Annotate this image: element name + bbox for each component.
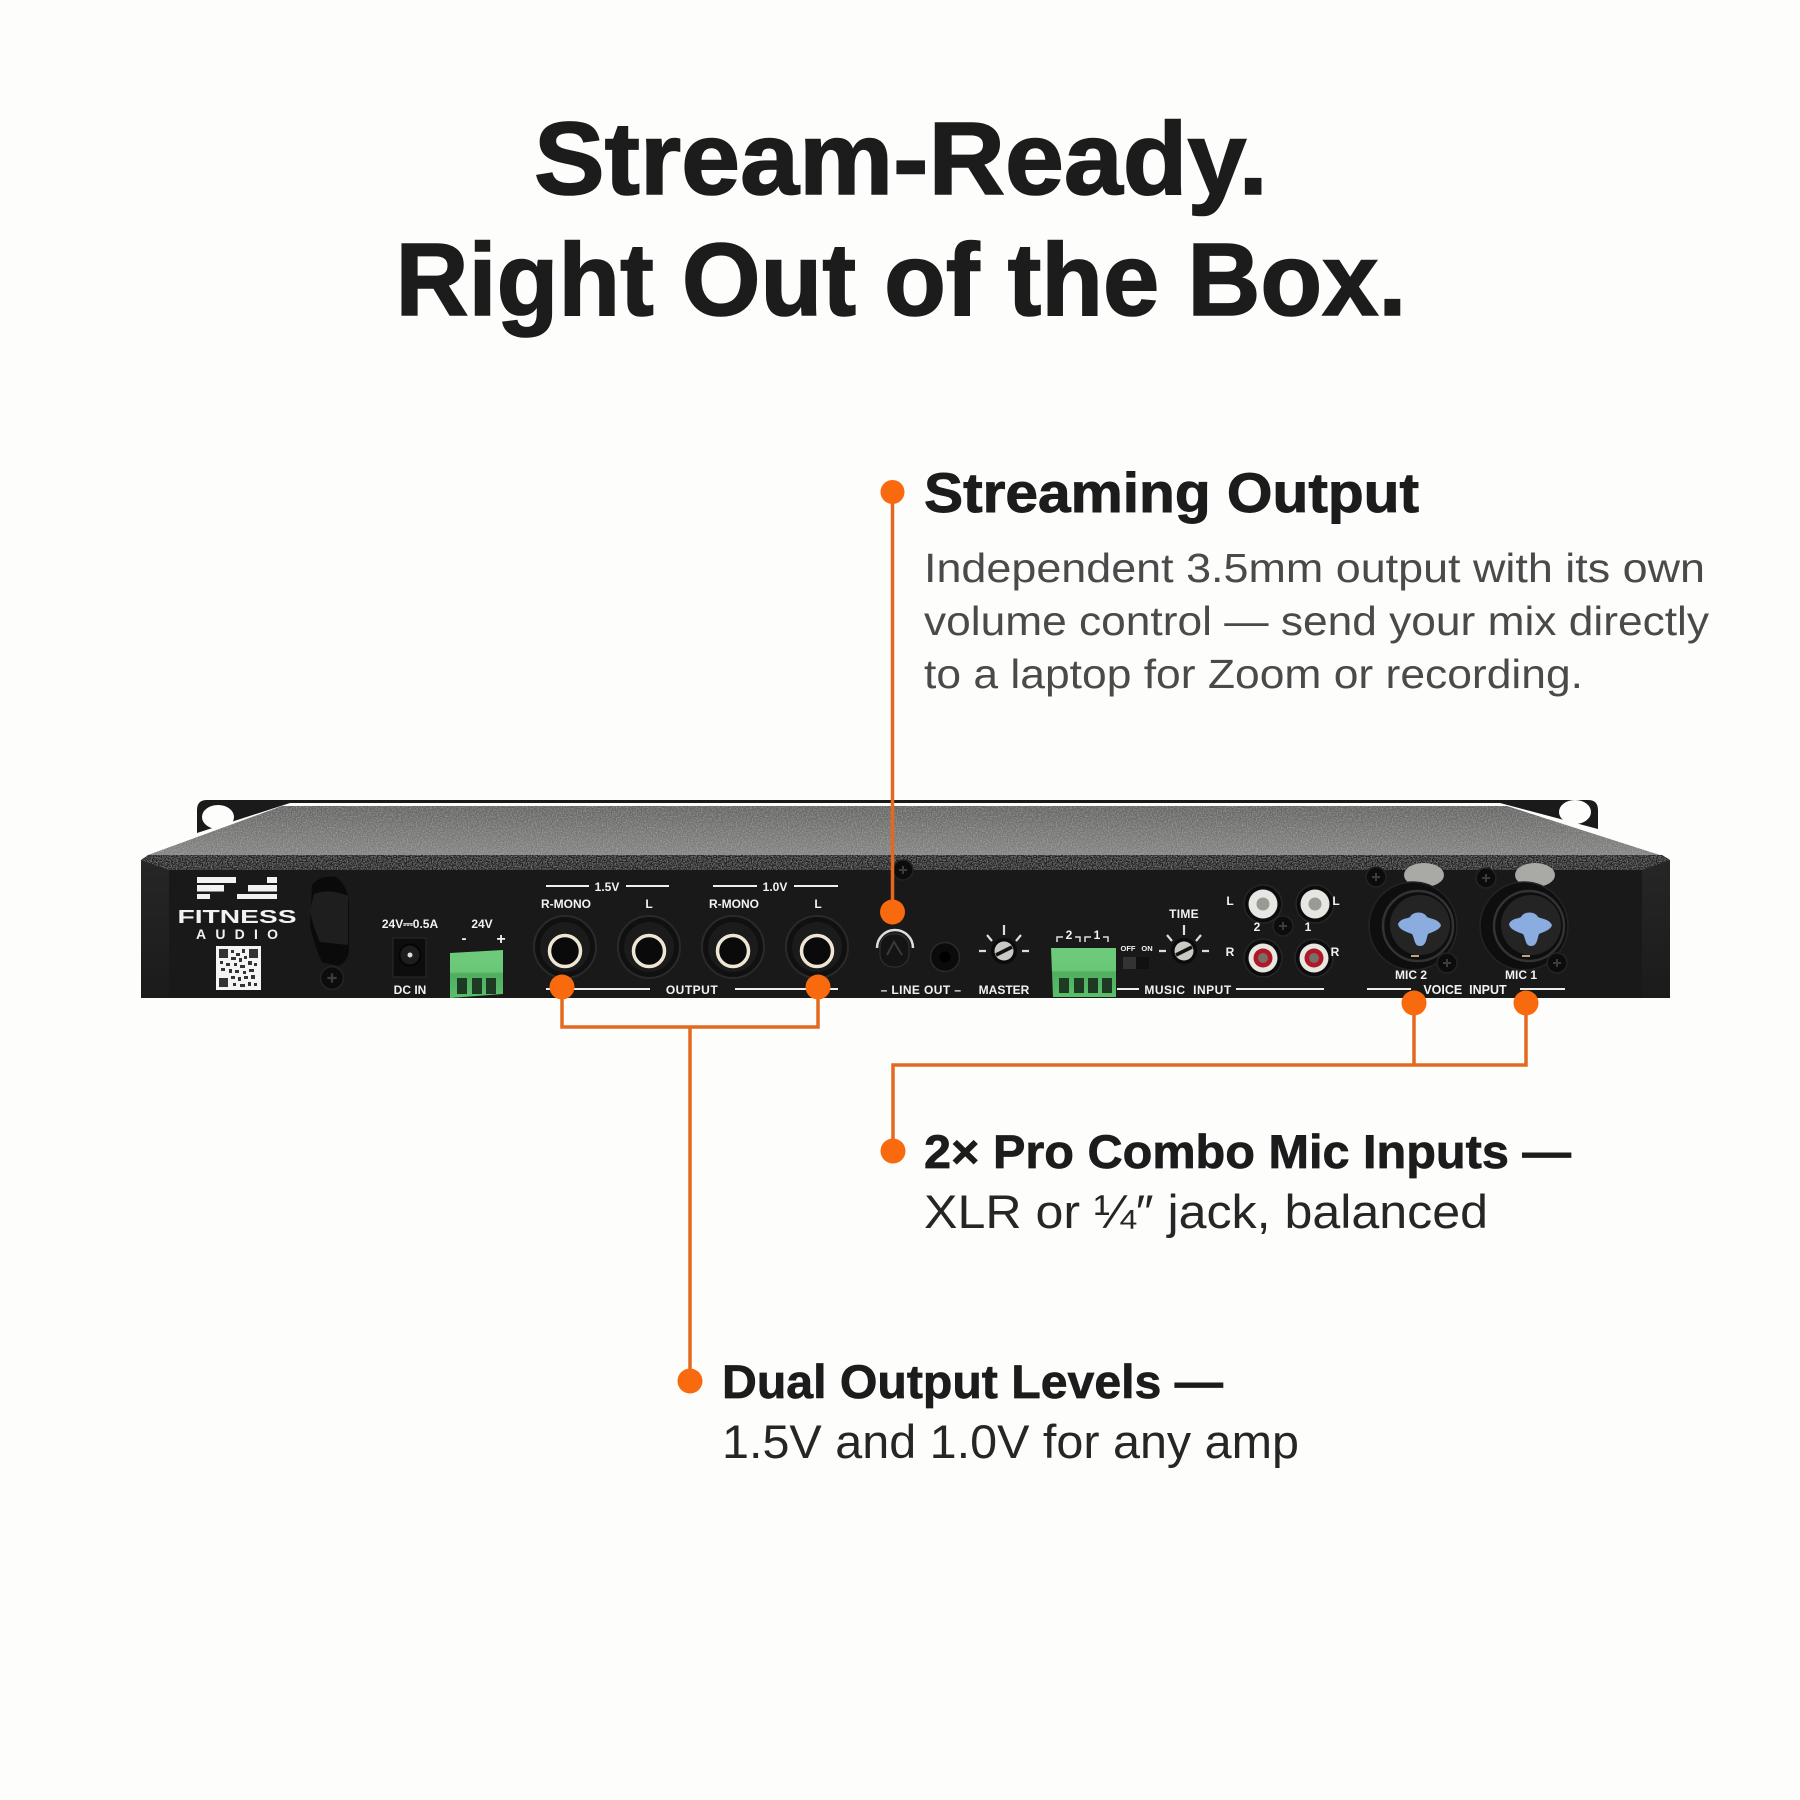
device front panel [141, 855, 1670, 998]
output jacks 1.5V: L [645, 897, 653, 911]
dots: mic anchors [880, 990, 1538, 1164]
voice input XLR combo jacks: VOICE INPUT [1423, 983, 1507, 997]
DC in power jack: DC IN [394, 983, 426, 997]
line out: toggle and 3.5mm jack: – LINE OUT – [881, 983, 961, 997]
logo: Fitness Audio [178, 877, 296, 942]
voice input XLR combo jacks: MIC 1 [1505, 968, 1537, 982]
icon: QR code [216, 946, 261, 990]
24V green terminal: - [462, 930, 466, 947]
description: mic inputs: XLR or ¼″ jack, balanced [924, 1185, 1488, 1238]
dot: top end [880, 480, 904, 504]
off/on switch: OFF [1120, 944, 1136, 953]
music input terminal: 2 [1066, 928, 1073, 942]
time knob: TIME [1169, 907, 1199, 921]
music input terminal [1051, 928, 1116, 997]
heading: streaming output: Streaming Output [924, 461, 1419, 524]
dot: line out anchor [880, 900, 905, 924]
music input RCA jacks: L [1226, 894, 1234, 908]
output jacks 1.5V [534, 880, 680, 978]
connector: streaming output [891, 492, 894, 912]
heading: dual output levels: Dual Output Levels — [722, 1355, 1223, 1408]
dots: output anchors [550, 974, 830, 1394]
description: streaming output: volume control — send your mix directly [924, 598, 1710, 644]
description: streaming output: to a laptop for Zoom or recording. [924, 651, 1583, 697]
24V green terminal [450, 917, 506, 998]
title: Right Out of the Box. [396, 222, 1406, 337]
music input RCA jacks: 2 [1254, 920, 1261, 934]
device: rear panel of rack audio mixer [141, 800, 1670, 998]
title [396, 101, 1406, 337]
off/on switch: ON [1141, 944, 1153, 953]
DC in power jack [382, 917, 438, 997]
24V green terminal: + [496, 931, 506, 948]
music input RCA jacks: MUSIC INPUT [1144, 983, 1232, 997]
music input terminal: 1 [1094, 928, 1101, 942]
time knob [1159, 907, 1209, 964]
output jacks 1.0V: R-MONO [709, 897, 759, 911]
output jacks 1.5V: R-MONO [541, 897, 591, 911]
connector: mic inputs [893, 1003, 1526, 1151]
DC in power jack: 24V⎓0.5A [382, 917, 438, 931]
master knob: MASTER [979, 983, 1030, 997]
music input RCA jacks [1117, 885, 1340, 997]
description: dual output levels: 1.5V and 1.0V for any amp [722, 1415, 1299, 1468]
off/on switch [1120, 944, 1153, 969]
line out: toggle and 3.5mm jack [877, 860, 961, 997]
master knob [979, 925, 1030, 997]
output jacks 1.0V [702, 880, 848, 978]
voice input XLR combo jacks [1366, 863, 1568, 997]
voice input XLR combo jacks: MIC 2 [1395, 968, 1427, 982]
title: Stream-Ready. [534, 101, 1268, 216]
heading: mic inputs: 2× Pro Combo Mic Inputs — [924, 1125, 1571, 1178]
logo: Fitness Audio: AUDIO [196, 926, 278, 942]
24V green terminal: 24V [471, 917, 493, 931]
device top cover and rack ears [148, 800, 1660, 855]
output jacks 1.0V: 1.0V [763, 880, 787, 894]
callout: mic inputs [880, 990, 1571, 1238]
output label: OUTPUT [666, 983, 718, 997]
music input RCA jacks: L [1332, 894, 1340, 908]
description: streaming output [924, 545, 1710, 697]
callout: dual output levels [550, 974, 1299, 1468]
output jacks 1.0V: L [814, 897, 822, 911]
logo: Fitness Audio: FITNESS [178, 907, 296, 927]
music input RCA jacks: R [1331, 945, 1340, 959]
output jacks 1.5V: 1.5V [595, 880, 619, 894]
music input RCA jacks: 1 [1305, 920, 1312, 934]
description: streaming output: Independent 3.5mm output with its own [924, 545, 1705, 591]
callout: streaming output [880, 461, 1710, 924]
music input RCA jacks: R [1226, 945, 1235, 959]
cable clip [310, 877, 349, 990]
connector: dual outputs [562, 987, 818, 1381]
